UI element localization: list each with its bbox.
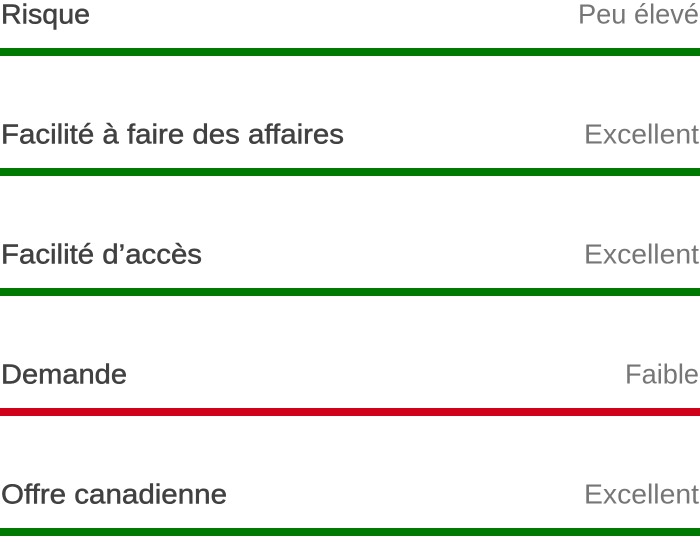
green status bar bbox=[0, 48, 700, 56]
label: Facilité à faire des affaires: Facilité à faire des affaires bbox=[1, 118, 344, 150]
row: Demande bbox=[0, 358, 700, 416]
row: Facilité à faire des affaires bbox=[0, 118, 700, 176]
row: Offre canadienne bbox=[0, 478, 700, 536]
value: Excellent: Excellent bbox=[584, 478, 699, 510]
row: Risque bbox=[0, 0, 700, 56]
green status bar bbox=[0, 528, 700, 536]
green status bar bbox=[0, 168, 700, 176]
value: Excellent: Excellent bbox=[584, 238, 699, 270]
value: Faible: Faible bbox=[625, 358, 699, 390]
green status bar bbox=[0, 288, 700, 296]
red status bar bbox=[0, 408, 700, 416]
label: Facilité d’accès: Facilité d’accès bbox=[1, 238, 202, 270]
row: Facilité d’accès bbox=[0, 238, 700, 296]
value: Excellent: Excellent bbox=[584, 118, 699, 150]
label: Offre canadienne: Offre canadienne bbox=[1, 478, 227, 510]
label: Demande: Demande bbox=[1, 358, 127, 390]
